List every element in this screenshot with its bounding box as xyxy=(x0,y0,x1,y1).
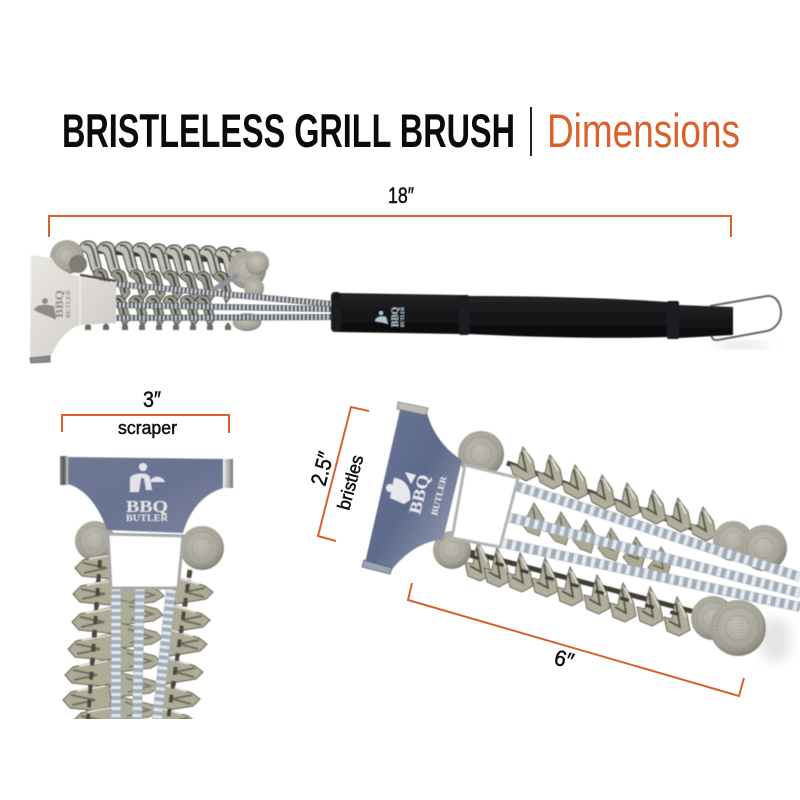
scraper head xyxy=(30,255,116,363)
angled bristle close-up photo xyxy=(362,402,800,662)
dimension: bristle length 6 inches xyxy=(408,583,744,696)
twisted rods xyxy=(116,588,171,720)
coil spines over coils xyxy=(88,560,190,720)
dimension: bristle width 2.5 inches xyxy=(306,407,369,541)
bracket: scraper width xyxy=(62,415,229,433)
left coils xyxy=(62,554,112,719)
shadow under carabiner xyxy=(716,342,768,348)
top row coils xyxy=(510,447,716,541)
plate logo xyxy=(126,463,169,523)
coil spines xyxy=(470,463,706,615)
handle logo: BUTLER xyxy=(401,307,406,327)
carabiner xyxy=(710,296,781,340)
title xyxy=(62,104,740,157)
plate end tabs xyxy=(60,456,233,488)
dimension: scraper width 3 inches xyxy=(62,387,229,438)
plate logo: BUTLER xyxy=(429,475,449,516)
scraper plate xyxy=(68,457,223,533)
label: 6 inches: 6″ xyxy=(552,645,577,674)
scraper logo: BUTLER xyxy=(65,290,72,318)
bracket: overall length xyxy=(49,216,731,237)
plate logo: BBQ xyxy=(126,497,168,516)
collar xyxy=(452,465,518,547)
scraper plate xyxy=(365,410,462,572)
label: 18 inches: 18″ xyxy=(388,183,414,208)
middle row coils xyxy=(521,503,671,580)
plate logo: BUTLER xyxy=(126,513,169,523)
scraper logo: BBQ xyxy=(52,290,66,318)
handle logo xyxy=(375,307,406,327)
plate logo: BBQ xyxy=(405,473,434,516)
soft shadow xyxy=(759,618,791,662)
label: bristles: bristles xyxy=(334,453,367,512)
mesh balls xyxy=(75,521,224,570)
twisted rods xyxy=(503,485,800,607)
title: dimensions word: Dimensions xyxy=(547,104,740,157)
handle logo: BBQ xyxy=(390,307,400,327)
mesh balls xyxy=(50,240,269,331)
label: 2.5 inches: 2.5″ xyxy=(306,449,339,488)
twisted rods xyxy=(115,275,332,318)
scraper close-up photo xyxy=(60,456,233,734)
right coils xyxy=(162,577,214,719)
top row coils xyxy=(79,241,253,281)
plate logo xyxy=(386,472,449,516)
dimension: overall length 18 inches xyxy=(49,183,731,237)
plate end tabs xyxy=(362,402,428,574)
lower row coils xyxy=(93,269,232,327)
bottom spikes xyxy=(85,322,231,330)
bottom row coils xyxy=(465,542,690,636)
title: product name: BRISTLELESS GRILL BRUSH xyxy=(62,104,515,157)
collar xyxy=(108,534,183,588)
mesh balls xyxy=(433,431,787,656)
coil spine over bottom row xyxy=(470,556,706,622)
scraper logo xyxy=(34,290,72,320)
coil spines xyxy=(88,560,190,720)
bracket: bristle length xyxy=(408,583,744,696)
label: scraper: scraper xyxy=(118,418,177,438)
label: 3 inches: 3″ xyxy=(143,387,161,412)
full brush photo xyxy=(30,240,781,363)
center coils xyxy=(120,588,165,719)
top coil spine xyxy=(85,250,240,262)
bracket: bristle width xyxy=(318,407,369,541)
title: separator xyxy=(530,107,532,156)
handle xyxy=(331,292,781,348)
